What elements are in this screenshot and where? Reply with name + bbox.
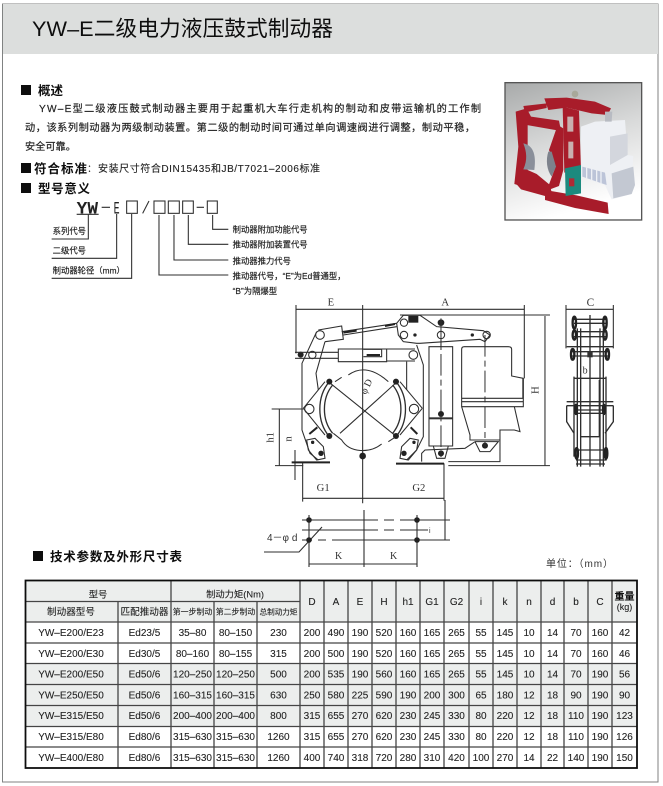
end-view drawing: C bbox=[587, 297, 594, 309]
table rows: 180 bbox=[497, 690, 514, 702]
table rows: 150 bbox=[616, 753, 633, 764]
table header bbox=[47, 588, 634, 618]
table rows: 10 bbox=[523, 649, 535, 660]
table rows: 270 bbox=[497, 753, 514, 764]
table rows: 245 bbox=[424, 732, 441, 743]
table rows: 200–400 bbox=[173, 711, 212, 722]
dimension lines: G1 bbox=[317, 483, 330, 494]
table rows: 318 bbox=[352, 753, 369, 764]
table rows: 100 bbox=[473, 753, 490, 764]
bolt hole diagram: K bbox=[390, 551, 398, 562]
dimension lines: n bbox=[284, 436, 295, 442]
table header: d bbox=[550, 597, 555, 608]
table rows: 90 bbox=[570, 690, 582, 702]
table rows: 190 bbox=[592, 732, 609, 743]
table rows: 400 bbox=[304, 753, 321, 764]
bolt hole diagram: i bbox=[429, 528, 431, 535]
unit note: 单位：（mm） bbox=[546, 557, 613, 570]
overview paragraph bbox=[25, 102, 481, 153]
table header: A bbox=[333, 597, 340, 608]
red brake frame bbox=[514, 98, 611, 214]
table rows: 18 bbox=[547, 711, 558, 722]
section: standards: ： bbox=[87, 164, 97, 175]
table rows: 70 bbox=[570, 628, 582, 639]
table rows: 200–400 bbox=[216, 711, 255, 722]
dimension lines: E bbox=[328, 297, 334, 308]
table rows: 315 bbox=[304, 711, 321, 722]
table rows: 14 bbox=[547, 670, 558, 680]
table rows: 18 bbox=[547, 732, 558, 743]
brake shoes bbox=[320, 382, 405, 437]
table rows: YW–E315/E50 bbox=[38, 711, 104, 722]
table header: 第一步制动 bbox=[173, 606, 212, 616]
table rows: Ed50/6 bbox=[129, 690, 161, 702]
table rows: 55 bbox=[475, 628, 487, 639]
section: model meaning: 型号意义 bbox=[38, 181, 90, 196]
table rows: 190 bbox=[352, 628, 369, 639]
table header: 重量 bbox=[614, 590, 634, 603]
table header: 第二步制动 bbox=[216, 606, 255, 616]
model code diagram: 制动器轮径（mm） bbox=[53, 265, 125, 275]
table rows: 330 bbox=[448, 711, 465, 722]
table rows: 14 bbox=[547, 628, 558, 639]
table header: G2 bbox=[450, 597, 464, 608]
table header: D bbox=[308, 597, 316, 608]
table rows: 250 bbox=[304, 690, 321, 702]
dimension lines: H bbox=[530, 386, 541, 394]
table rows: Ed50/6 bbox=[129, 711, 161, 722]
table rows: 126 bbox=[616, 732, 633, 743]
table rows: 65 bbox=[475, 690, 487, 702]
table rows: 620 bbox=[376, 732, 393, 743]
table rows: 200 bbox=[424, 690, 441, 702]
table rows: 80–150 bbox=[219, 628, 253, 639]
end-view drawing bbox=[566, 297, 613, 467]
table rows: 56 bbox=[619, 670, 630, 680]
table rows: YW–E200/E50 bbox=[38, 670, 104, 680]
table rows: 160 bbox=[592, 649, 609, 660]
table rows: 14 bbox=[523, 753, 535, 764]
table rows: 90 bbox=[619, 690, 630, 702]
model code diagram: 二级代号 bbox=[53, 245, 86, 255]
table rows: 1260 bbox=[267, 753, 290, 764]
table header: C bbox=[596, 597, 604, 608]
table rows: 14 bbox=[547, 649, 558, 660]
section: overview: 概述 bbox=[38, 83, 64, 98]
table rows: 70 bbox=[570, 670, 582, 680]
table rows: 225 bbox=[352, 690, 369, 702]
table rows: 230 bbox=[400, 732, 417, 743]
table rows: 160 bbox=[592, 628, 609, 639]
motor bbox=[448, 347, 523, 462]
table rows: 655 bbox=[328, 732, 345, 743]
table rows: 165 bbox=[424, 649, 441, 660]
overview paragraph: YW–E型二级液压鼓式制动器主要用于起重机大车行走机构的制动和皮带运输机的工作制 bbox=[39, 102, 481, 115]
table rows: 1260 bbox=[267, 732, 290, 743]
table rows: 80 bbox=[475, 711, 487, 722]
base plates bbox=[292, 462, 444, 464]
table rows: 55 bbox=[475, 649, 487, 660]
table rows: 245 bbox=[424, 711, 441, 722]
table rows: 145 bbox=[497, 649, 514, 660]
overview paragraph: 安全可靠。 bbox=[25, 140, 76, 153]
dimension lines: G2 bbox=[412, 483, 425, 494]
table rows: 12 bbox=[523, 690, 535, 702]
title: YW–E二级电力液压鼓式制动器 bbox=[32, 16, 333, 41]
model code diagram: E bbox=[114, 200, 120, 219]
table rows: 190 bbox=[592, 670, 609, 680]
table rows: 720 bbox=[376, 753, 393, 764]
table rows: YW–E200/E23 bbox=[38, 628, 104, 639]
table rows: 22 bbox=[547, 753, 558, 764]
thruster bbox=[429, 340, 453, 458]
table header: G1 bbox=[425, 597, 439, 608]
bolt hole diagram: K bbox=[335, 551, 343, 562]
table rows: 520 bbox=[376, 628, 393, 639]
table rows: 315–630 bbox=[173, 732, 212, 743]
table rows: 120–250 bbox=[173, 670, 212, 680]
header band bbox=[3, 4, 658, 54]
table shading bbox=[25, 580, 637, 726]
table rows: 590 bbox=[376, 690, 393, 702]
table rows: 46 bbox=[619, 649, 630, 660]
section: standards: 安装尺寸符合DIN15435和JB/T7021–2006标准 bbox=[98, 162, 320, 175]
table rows: 55 bbox=[475, 670, 487, 680]
table rows: 560 bbox=[376, 670, 393, 680]
table rows: 300 bbox=[448, 690, 465, 702]
table rows: 220 bbox=[497, 711, 514, 722]
dimension lines: h1 bbox=[265, 432, 276, 443]
table rows: 110 bbox=[568, 732, 584, 743]
section: overview bbox=[21, 83, 64, 98]
table rows: 315–630 bbox=[173, 753, 212, 764]
table rows: 120–250 bbox=[216, 670, 255, 680]
thruster cylinder bbox=[565, 165, 581, 196]
table rows: 265 bbox=[448, 628, 465, 639]
table rows: 230 bbox=[400, 711, 417, 722]
table rows: 315–630 bbox=[216, 753, 255, 764]
table rows: 740 bbox=[328, 753, 345, 764]
table rows: 10 bbox=[523, 628, 535, 639]
table rows: 140 bbox=[568, 753, 585, 764]
table header: i bbox=[480, 597, 482, 608]
table rows: Ed80/6 bbox=[129, 732, 161, 743]
table rows: 280 bbox=[400, 753, 417, 764]
drum bbox=[333, 370, 395, 451]
table rows: 10 bbox=[523, 670, 535, 680]
table rows: 270 bbox=[352, 711, 369, 722]
table header: n bbox=[526, 597, 532, 608]
table rows: Ed50/6 bbox=[129, 670, 161, 680]
main side-view drawing bbox=[265, 297, 550, 503]
table rows: 160 bbox=[400, 670, 417, 680]
model code diagram bbox=[52, 199, 346, 296]
table rows: 160–315 bbox=[173, 690, 212, 702]
brake shoe bbox=[523, 143, 535, 170]
table header: E bbox=[357, 597, 364, 608]
bolt hole diagram: 4－φ d bbox=[267, 533, 297, 544]
table rows: 620 bbox=[376, 711, 393, 722]
table rows: 190 bbox=[592, 690, 609, 702]
section: standards: 符合标准 bbox=[34, 161, 87, 176]
table rows: 42 bbox=[619, 628, 630, 639]
table rows: 165 bbox=[424, 628, 441, 639]
table rows: 490 bbox=[328, 628, 345, 639]
table rows: 330 bbox=[448, 732, 465, 743]
table rows: 270 bbox=[352, 732, 369, 743]
model code diagram: 系列代号 bbox=[53, 226, 86, 236]
table rows: 160 bbox=[400, 649, 417, 660]
table rows: 315–630 bbox=[216, 732, 255, 743]
table rows: 190 bbox=[592, 711, 609, 722]
table rows: 123 bbox=[616, 711, 633, 722]
table rows: 165 bbox=[424, 670, 441, 680]
table header: b bbox=[573, 597, 579, 608]
table rows: 315 bbox=[270, 649, 287, 660]
table grid bbox=[25, 580, 637, 768]
table rows: 265 bbox=[448, 649, 465, 660]
table rows: 230 bbox=[270, 628, 287, 639]
table rows: 800 bbox=[270, 711, 287, 722]
table rows: 420 bbox=[448, 753, 465, 764]
table rows: 70 bbox=[570, 649, 582, 660]
model code diagram: “B”为隔爆型 bbox=[233, 286, 277, 296]
table rows: 160 bbox=[400, 628, 417, 639]
table rows bbox=[38, 628, 633, 764]
table rows: 190 bbox=[352, 670, 369, 680]
table rows: 18 bbox=[547, 690, 558, 702]
table rows: YW–E250/E50 bbox=[38, 690, 104, 702]
table rows: 35–80 bbox=[179, 628, 207, 639]
table header: 匹配推动器 bbox=[121, 606, 169, 618]
bolt hole diagram bbox=[264, 500, 450, 567]
linkage rods bbox=[295, 323, 415, 362]
table rows: 655 bbox=[328, 711, 345, 722]
table rows: 630 bbox=[270, 690, 287, 702]
dimension lines: A bbox=[441, 298, 449, 309]
model code diagram: 推动器附加装置代号 bbox=[233, 239, 308, 249]
table rows: 12 bbox=[523, 711, 535, 722]
section: standards bbox=[21, 161, 320, 176]
table rows: 520 bbox=[376, 649, 393, 660]
model code diagram: 制动器附加功能代号 bbox=[233, 224, 308, 234]
table rows: 190 bbox=[592, 753, 609, 764]
overview paragraph: 动，该系列制动器为两级制动装置。第二级的制动时间可通过单向调速阀进行调整，制动平稳， bbox=[25, 121, 475, 134]
table rows: 200 bbox=[304, 649, 321, 660]
product photo bbox=[505, 83, 642, 220]
table rows: 580 bbox=[328, 690, 345, 702]
table rows: 200 bbox=[304, 670, 321, 680]
table rows: 145 bbox=[497, 670, 514, 680]
section: technical parameters: 技术参数及外形尺寸表 bbox=[50, 549, 182, 564]
table rows: 535 bbox=[328, 670, 345, 680]
table rows: 200 bbox=[304, 628, 321, 639]
parameter table bbox=[25, 580, 637, 768]
table header: (kg) bbox=[617, 602, 632, 612]
model code diagram: 推动器推力代号 bbox=[233, 256, 291, 266]
table header: k bbox=[502, 597, 508, 608]
table rows: 190 bbox=[400, 690, 417, 702]
table rows: 315 bbox=[304, 732, 321, 743]
table rows: YW–E200/E30 bbox=[38, 649, 104, 660]
dimension lines bbox=[265, 297, 550, 503]
table header: 制动力矩(Nm) bbox=[206, 588, 264, 600]
table header: 总制动力矩 bbox=[260, 606, 298, 616]
table rows: Ed23/5 bbox=[129, 628, 161, 639]
table rows: YW–E400/E80 bbox=[38, 753, 104, 764]
table rows: 310 bbox=[424, 753, 441, 764]
table rows: 500 bbox=[328, 649, 345, 660]
shoe plates bbox=[303, 382, 422, 460]
table rows: Ed30/5 bbox=[129, 649, 161, 660]
table rows: 12 bbox=[523, 732, 535, 743]
table rows: 265 bbox=[448, 670, 465, 680]
brake frame outline bbox=[302, 332, 475, 462]
table rows: 145 bbox=[497, 628, 514, 639]
table header: 制动器型号 bbox=[47, 606, 95, 618]
table rows: 80 bbox=[475, 732, 487, 743]
table header: H bbox=[380, 597, 388, 608]
table rows: 80–155 bbox=[219, 649, 253, 660]
table header: 型号 bbox=[89, 590, 107, 600]
table rows: 80–160 bbox=[176, 649, 210, 660]
electric motor bbox=[581, 120, 635, 199]
model code diagram: YW bbox=[77, 199, 98, 219]
table rows: Ed80/6 bbox=[129, 753, 161, 764]
table rows: 160–315 bbox=[216, 690, 255, 702]
model code diagram: 推动器代号，“E”为Ed普通型， bbox=[233, 271, 346, 281]
table rows: YW–E315/E80 bbox=[38, 732, 104, 743]
table header: h1 bbox=[402, 597, 414, 608]
dimension lines: φ D bbox=[359, 378, 375, 396]
top lever bbox=[397, 315, 490, 343]
table rows: 220 bbox=[497, 732, 514, 743]
section: model meaning bbox=[21, 181, 90, 196]
table rows: 110 bbox=[568, 711, 584, 722]
end-view drawing: b bbox=[583, 365, 588, 376]
table rows: 190 bbox=[352, 649, 369, 660]
table rows: 500 bbox=[270, 670, 287, 680]
